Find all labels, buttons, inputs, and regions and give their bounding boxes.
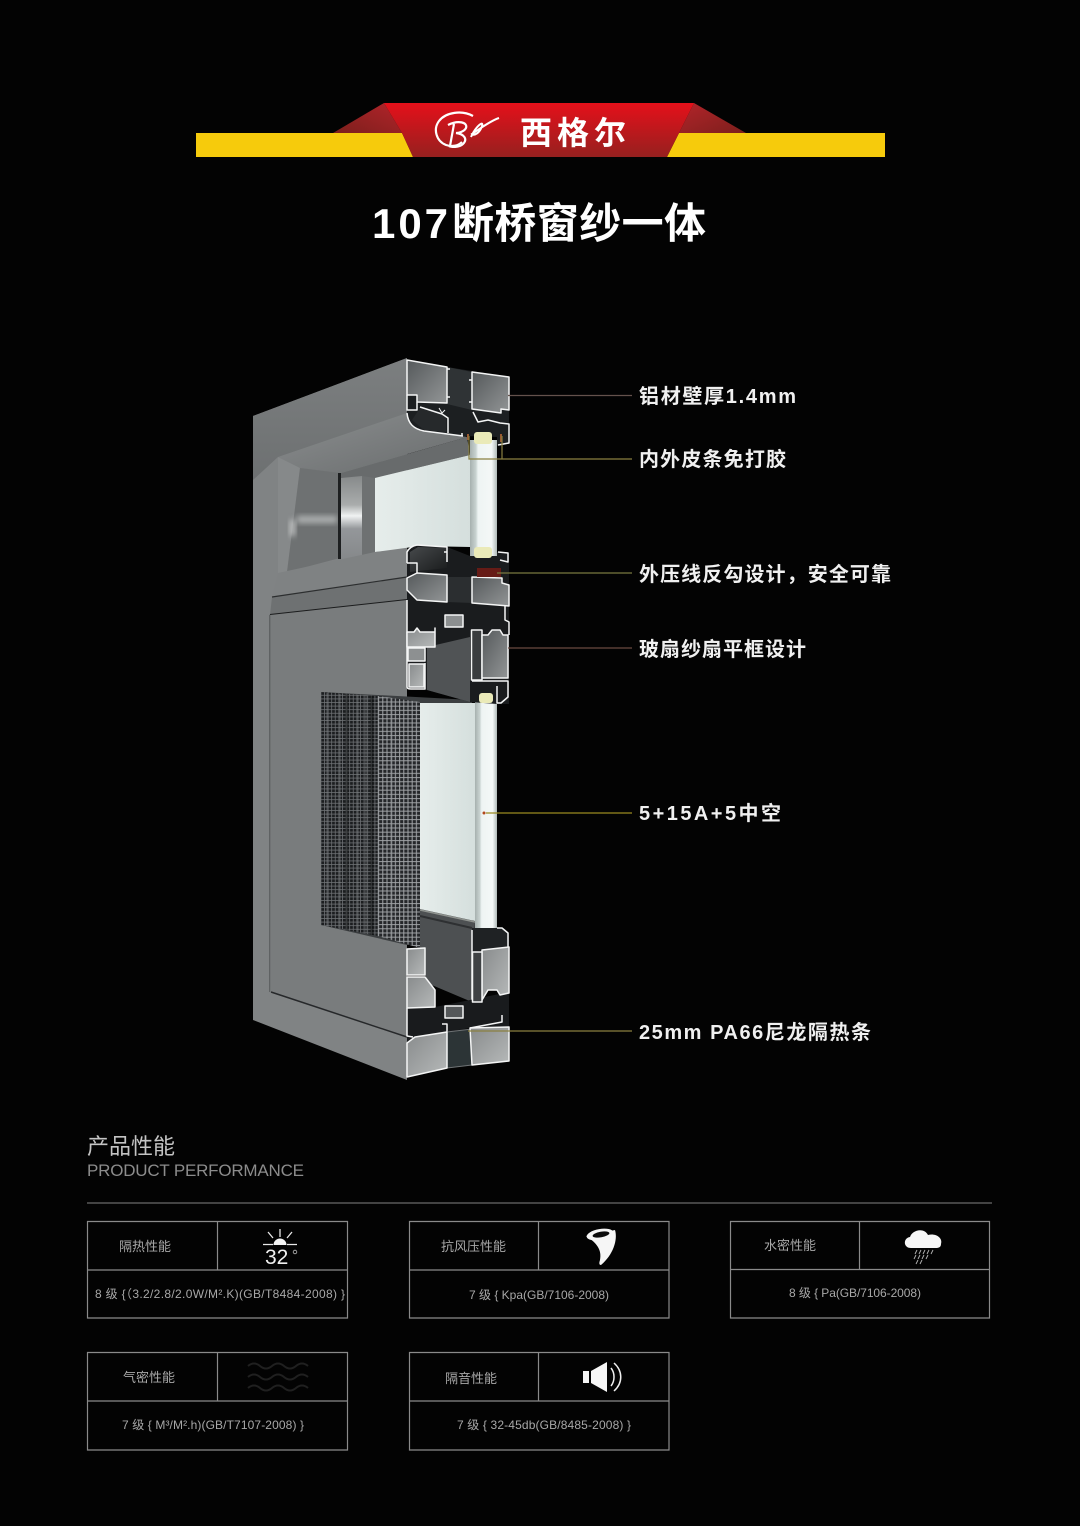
card: air tightness bbox=[88, 1352, 348, 1450]
callout: pressure line: 外压线反勾设计，安全可靠 bbox=[639, 562, 891, 586]
head section profile bbox=[407, 360, 509, 446]
card: sound insulation: 7 级 { 32-45db(GB/8485-2008) } bbox=[457, 1418, 631, 1432]
upper glass edge bbox=[470, 440, 497, 556]
section heading: product performance: PRODUCT PERFORMANCE bbox=[87, 1161, 304, 1180]
sash interior bbox=[420, 910, 475, 1002]
icon: tornado bbox=[586, 1227, 616, 1265]
card: wind pressure: 抗风压性能 bbox=[441, 1239, 506, 1254]
lower glass edge bbox=[475, 695, 497, 930]
card: wind pressure: 7 级 { Kpa(GB/7106-2008) bbox=[469, 1288, 609, 1302]
gasket red detail bbox=[477, 568, 501, 577]
glass spacers bbox=[474, 547, 492, 558]
brand logo bbox=[436, 113, 499, 147]
icon: rain cloud bbox=[905, 1230, 941, 1264]
card: thermal insulation: 8 级 {（3.2/2.8/2.0W/M².K)(GB/T8484-2008) } bbox=[95, 1287, 345, 1301]
screen opening bbox=[321, 692, 472, 945]
icon: sun 32 degrees bbox=[263, 1229, 297, 1269]
card: air tightness: 气密性能 bbox=[123, 1370, 175, 1385]
card: water tightness: 水密性能 bbox=[764, 1238, 816, 1253]
brand banner bbox=[196, 103, 885, 157]
frame silhouette bbox=[253, 358, 407, 1080]
icon: speaker bbox=[583, 1362, 621, 1392]
lower glass bbox=[420, 703, 475, 921]
card: thermal insulation bbox=[88, 1222, 348, 1318]
window cross-section illustration bbox=[253, 358, 509, 1080]
section heading: product performance: 产品性能 bbox=[87, 1134, 175, 1159]
callout: aluminium wall thickness: 铝材壁厚1.4mm bbox=[639, 384, 796, 408]
callout: insulated glass bbox=[482, 802, 781, 825]
upper glass spacer bbox=[474, 432, 492, 444]
card: water tightness: 8 级 { Pa(GB/7106-2008) bbox=[789, 1286, 921, 1300]
silver inner frame bbox=[341, 468, 362, 560]
mid section profile bbox=[407, 545, 509, 704]
callout: gasket bbox=[469, 436, 786, 471]
card: thermal insulation: 隔热性能 bbox=[119, 1239, 171, 1254]
callout: thermal strip: 25mm PA66尼龙隔热条 bbox=[639, 1021, 871, 1044]
title: 断桥窗纱一体 bbox=[452, 200, 706, 247]
upper recess bbox=[278, 457, 300, 573]
card: sound insulation: 隔音性能 bbox=[445, 1371, 497, 1386]
section heading: product performance bbox=[87, 1134, 304, 1180]
bottom section profile bbox=[407, 928, 509, 1077]
callout: insulated glass: 5+15A+5中空 bbox=[639, 802, 781, 825]
callout: flush sash: 玻扇纱扇平框设计 bbox=[639, 637, 806, 661]
gaskets bbox=[468, 434, 501, 442]
callout: gasket: 内外皮条免打胶 bbox=[639, 447, 786, 471]
card: air tightness: 7 级 { M³/M².h)(GB/T7107-2008) } bbox=[122, 1418, 304, 1432]
card: water tightness bbox=[730, 1222, 990, 1318]
card: wind pressure bbox=[410, 1222, 669, 1318]
brand name: 西格尔 bbox=[520, 115, 626, 151]
card: sound insulation bbox=[410, 1352, 669, 1450]
top head face bbox=[253, 358, 467, 480]
title: 107 bbox=[372, 200, 448, 247]
divider bbox=[87, 1202, 992, 1204]
lower panel bbox=[270, 600, 407, 1037]
upper glass bbox=[375, 455, 470, 552]
icon: air waves bbox=[248, 1364, 308, 1390]
mid rail bbox=[272, 549, 412, 597]
insect screen mesh bbox=[321, 692, 420, 948]
shadow band above glass bbox=[341, 437, 470, 478]
icon: sun 32 degrees: 32 bbox=[265, 1246, 288, 1269]
